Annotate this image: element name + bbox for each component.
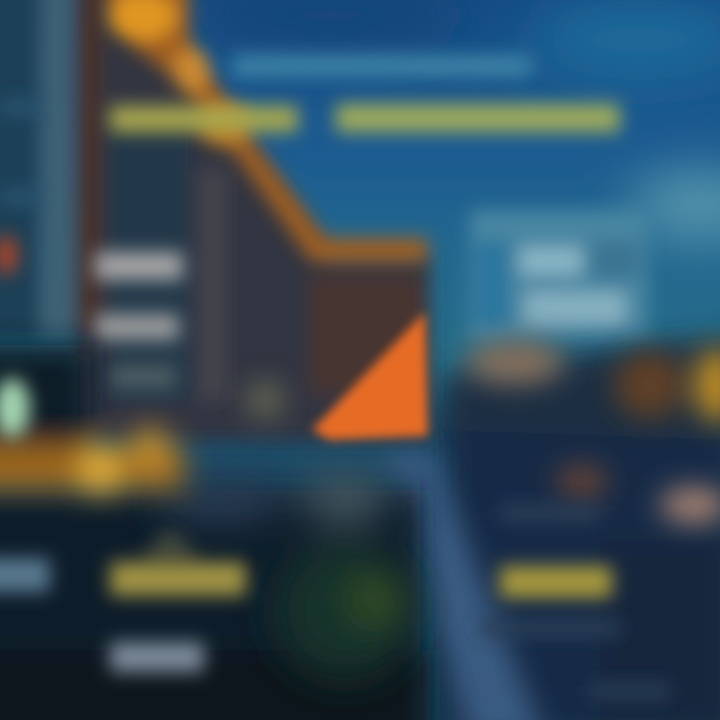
building windows (0, 100, 183, 389)
sidewalk strip (385, 450, 545, 720)
skyline lights (465, 340, 720, 523)
distant tower (470, 210, 648, 342)
left shop signs (0, 235, 50, 592)
heading line 1 (232, 56, 532, 76)
left stat label (110, 642, 204, 672)
green planting and plaza glow (155, 474, 415, 680)
right stat captions (480, 505, 670, 698)
dark lower left ground (0, 490, 430, 720)
street and lower right area (440, 335, 720, 720)
orange panel (312, 312, 428, 440)
right stat value (500, 566, 612, 598)
heading line 2 (110, 104, 620, 132)
street level shops (0, 345, 283, 496)
main building (0, 0, 430, 440)
orange roof edge (105, 0, 428, 262)
distant clouds (190, 0, 720, 237)
left stat value (110, 530, 246, 596)
